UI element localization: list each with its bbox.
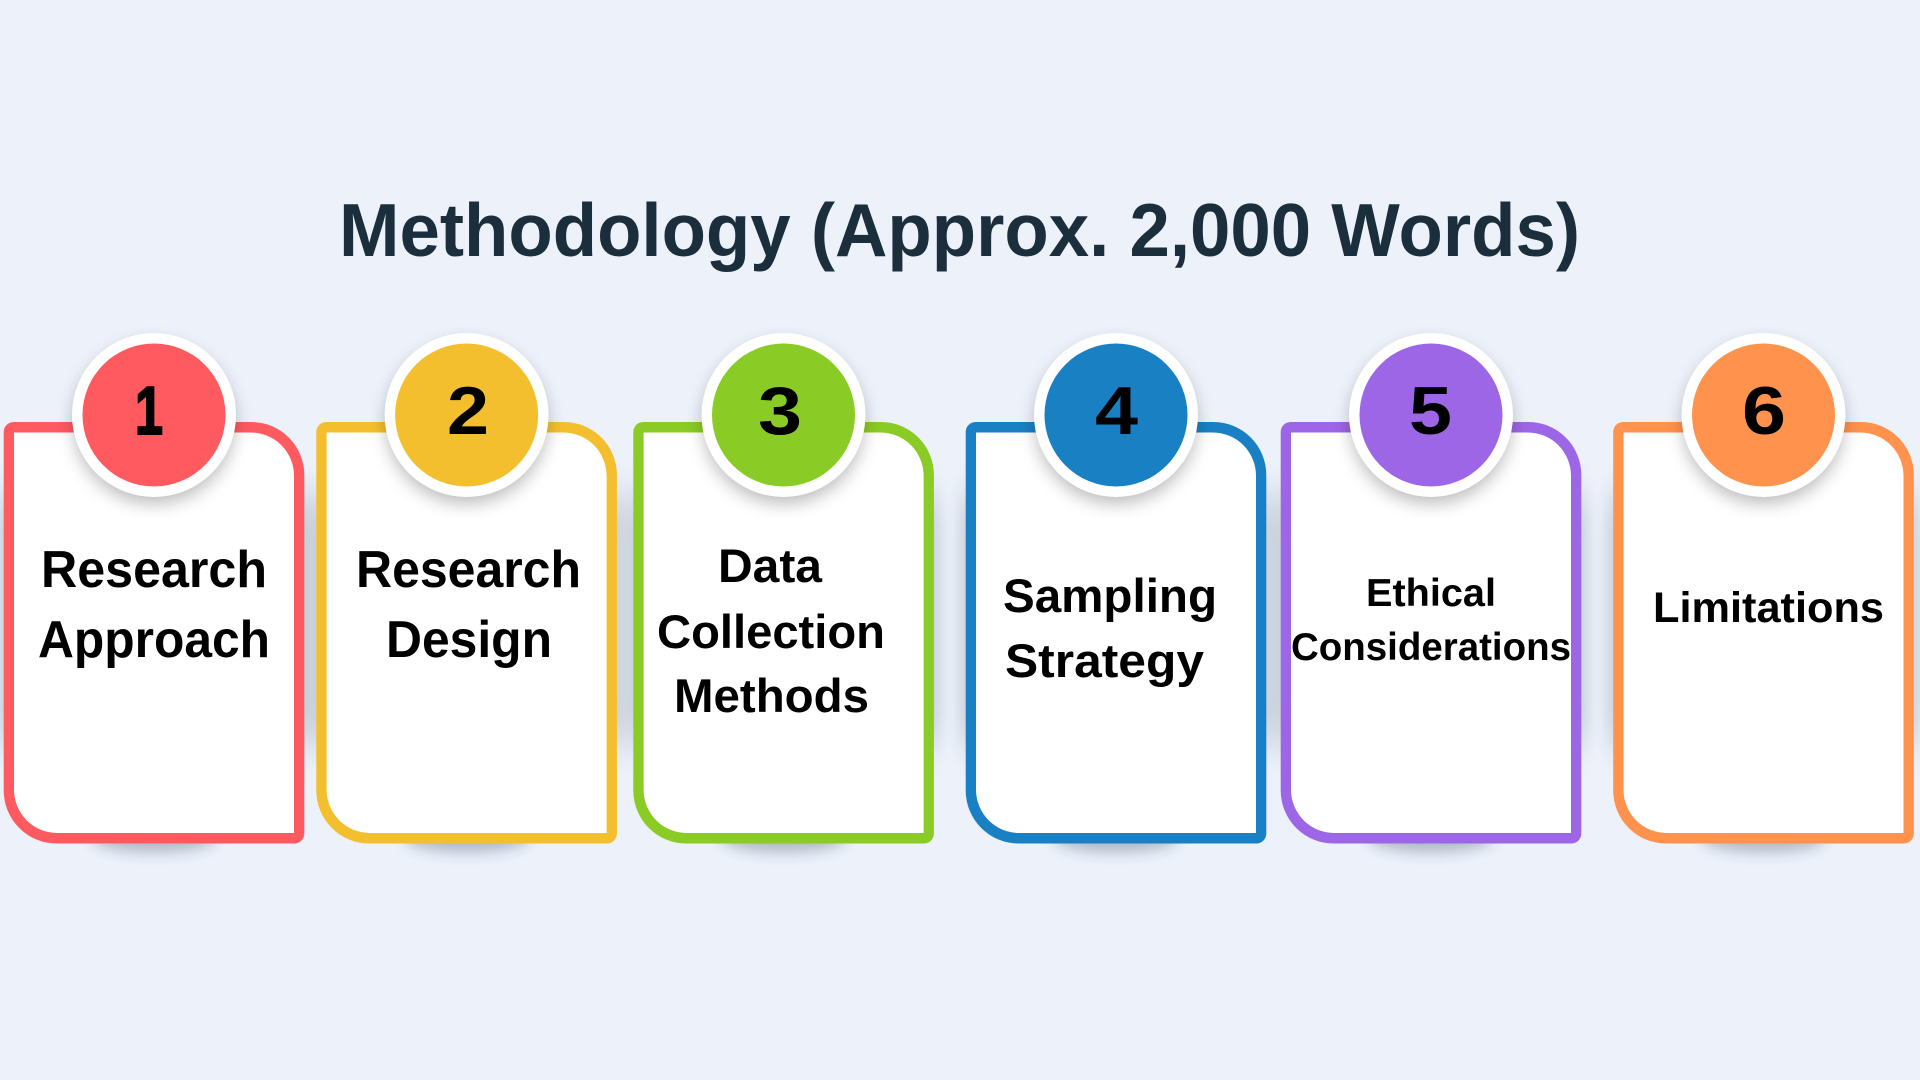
badge 2: 2	[447, 373, 489, 449]
label: Ethical Considerations	[1291, 572, 1571, 669]
badge 3: 3	[758, 373, 802, 449]
badge 1	[72, 333, 236, 503]
badge 5: 5	[1409, 373, 1452, 449]
label: Data Collection Methods: Collection	[657, 605, 885, 658]
label: Sampling Strategy: Strategy	[1005, 634, 1204, 687]
label: Data Collection Methods	[657, 539, 885, 722]
badge 1: 1	[135, 373, 163, 449]
title: Methodology (Approx. 2,000 Words)	[339, 188, 1580, 272]
label: Limitations: Limitations	[1653, 584, 1884, 632]
label: Research Approach	[38, 541, 270, 669]
label: Data Collection Methods: Data	[718, 539, 823, 592]
label: Ethical Considerations: Considerations	[1291, 626, 1571, 669]
card shadows	[0, 495, 1920, 852]
label: Research Approach: Research	[41, 541, 267, 599]
label: Sampling Strategy	[1003, 569, 1217, 687]
badge 6	[1682, 333, 1846, 503]
label: Research Design	[356, 541, 581, 669]
label: Research Approach: Approach	[38, 611, 270, 669]
badge 6: 6	[1742, 373, 1786, 449]
panel: card 3 Data Collection Methods	[633, 422, 934, 844]
label: Ethical Considerations: Ethical	[1366, 572, 1496, 615]
panel: card 4 Sampling Strategy	[966, 422, 1266, 844]
panel: card 5 Ethical Considerations	[1281, 422, 1581, 844]
badge 3	[702, 333, 866, 503]
label: Data Collection Methods: Methods	[674, 669, 869, 722]
label: Sampling Strategy: Sampling	[1003, 569, 1217, 622]
panel: card 1 Research Approach	[4, 422, 304, 844]
badge 4: 4	[1095, 373, 1138, 449]
label: Research Design: Research	[356, 541, 581, 599]
badge 5	[1349, 333, 1513, 503]
label: Research Design: Design	[386, 611, 552, 669]
panel: card 6 Limitations	[1613, 422, 1914, 844]
badge 4	[1034, 333, 1198, 503]
badge 2	[385, 333, 549, 503]
panel: card 2 Research Design	[316, 422, 617, 844]
